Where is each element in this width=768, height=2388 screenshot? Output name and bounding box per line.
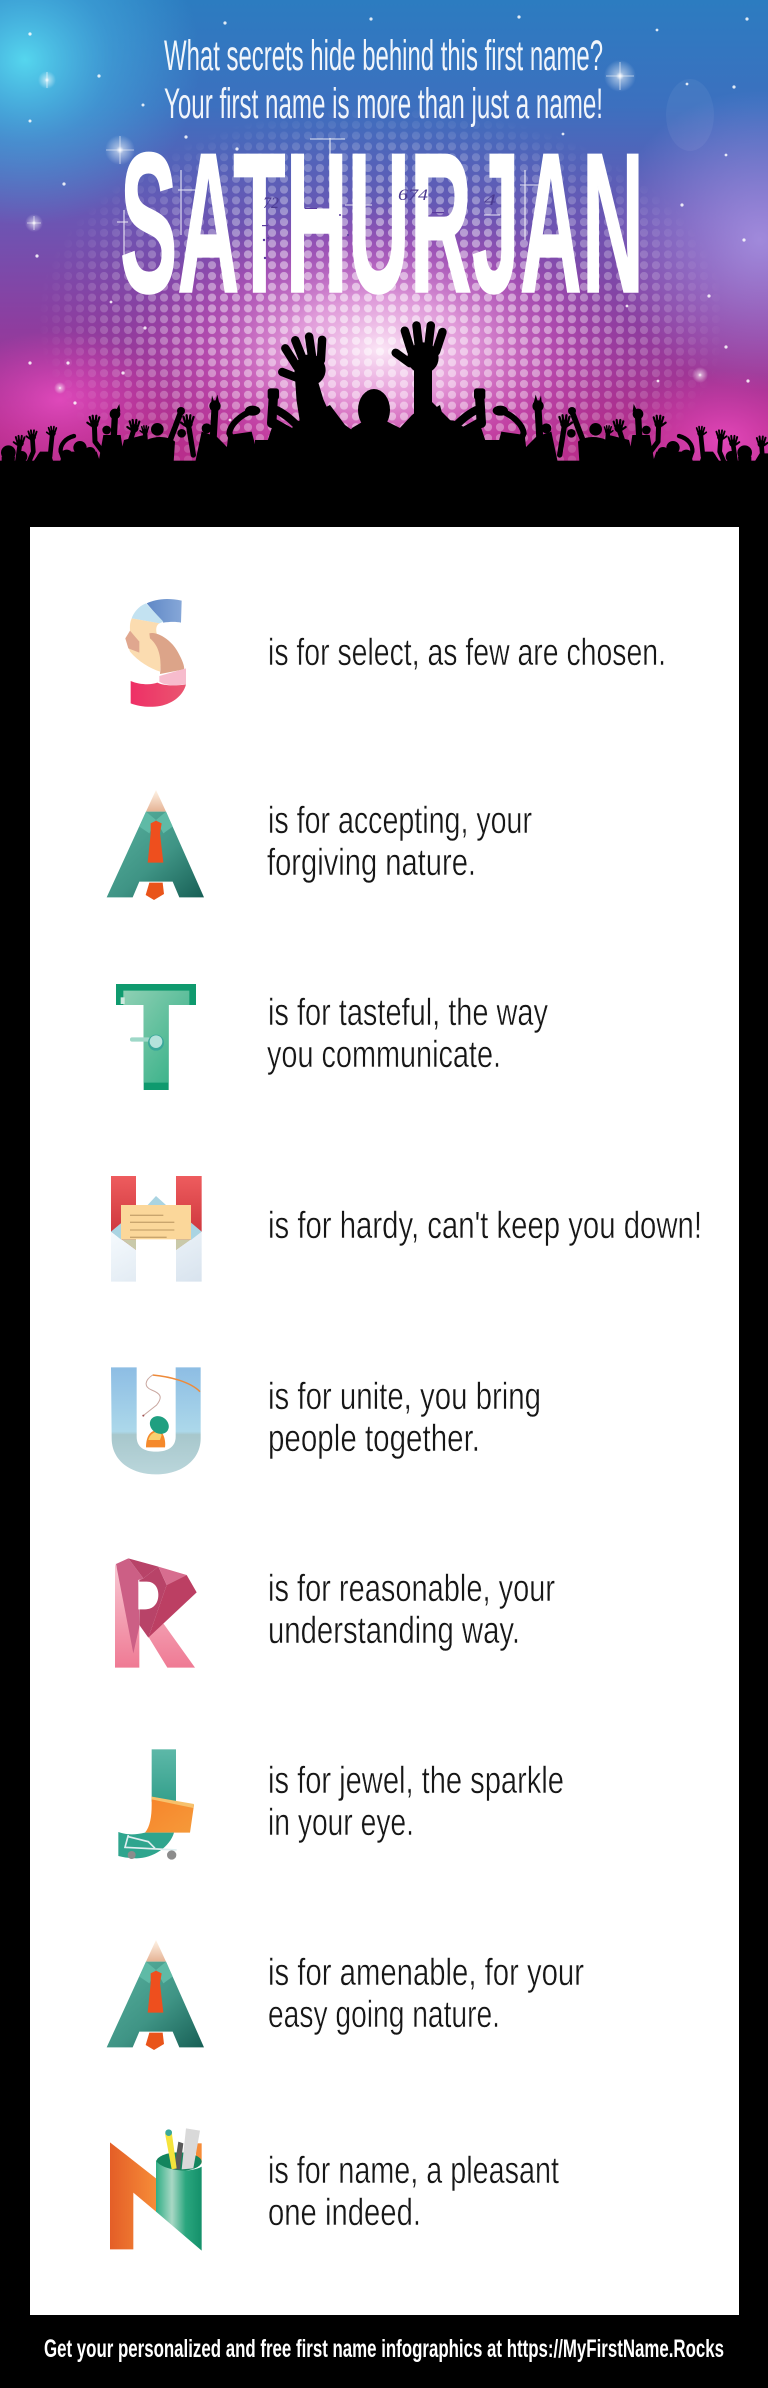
text: U line: people together. xyxy=(268,1418,480,1460)
text: N line xyxy=(268,2150,559,2234)
text: U line: is for unite, you bring xyxy=(268,1376,541,1418)
row: letter A xyxy=(107,790,532,900)
white content panel xyxy=(30,527,739,2315)
text: T line xyxy=(267,992,548,1076)
icon: S with hands xyxy=(125,599,186,707)
text: T line: you communicate. xyxy=(267,1034,501,1076)
row: letter H xyxy=(111,1176,702,1282)
text: R line xyxy=(268,1568,555,1652)
row: letter N xyxy=(110,2128,559,2251)
icon: R ruby xyxy=(115,1558,197,1668)
row: letter S xyxy=(125,599,666,707)
text: T line: is for tasteful, the way xyxy=(268,992,548,1034)
text: second A line: easy going nature. xyxy=(268,1994,500,2036)
text: J line: in your eye. xyxy=(268,1802,414,1844)
icon: J shopping cart xyxy=(118,1749,194,1860)
tagline xyxy=(164,32,603,128)
icon: N pen holder xyxy=(110,2128,202,2251)
text: N line: one indeed. xyxy=(268,2192,421,2234)
crowd silhouette xyxy=(0,326,768,528)
icon: H envelope xyxy=(111,1176,202,1282)
header background xyxy=(0,0,768,461)
text: second A line xyxy=(268,1952,584,2036)
first name title: 674 xyxy=(398,187,428,204)
text: J line: is for jewel, the sparkle xyxy=(268,1760,564,1802)
text: A line xyxy=(267,800,532,884)
text: N line: is for name, a pleasant xyxy=(268,2150,559,2192)
row: letter U xyxy=(111,1367,541,1474)
text: A line: is for accepting, your xyxy=(268,800,532,842)
icon: T door xyxy=(116,984,196,1090)
icon: A with tie xyxy=(107,1940,204,2050)
first name title: 4 xyxy=(484,192,496,209)
row: letter R xyxy=(115,1558,555,1668)
text: U line xyxy=(268,1376,541,1460)
row: letter J xyxy=(118,1749,564,1860)
first name title: 72 xyxy=(263,195,279,212)
icon: U fishing xyxy=(111,1367,201,1474)
text: J line xyxy=(268,1760,564,1844)
icon: A with tie xyxy=(107,790,204,900)
text: second A line: is for amenable, for your xyxy=(268,1952,584,1994)
row: letter T xyxy=(116,984,548,1090)
text: A line: forgiving nature. xyxy=(267,842,476,884)
text: R line: understanding way. xyxy=(268,1610,520,1652)
text: R line: is for reasonable, your xyxy=(268,1568,555,1610)
row: second letter A xyxy=(107,1940,584,2050)
